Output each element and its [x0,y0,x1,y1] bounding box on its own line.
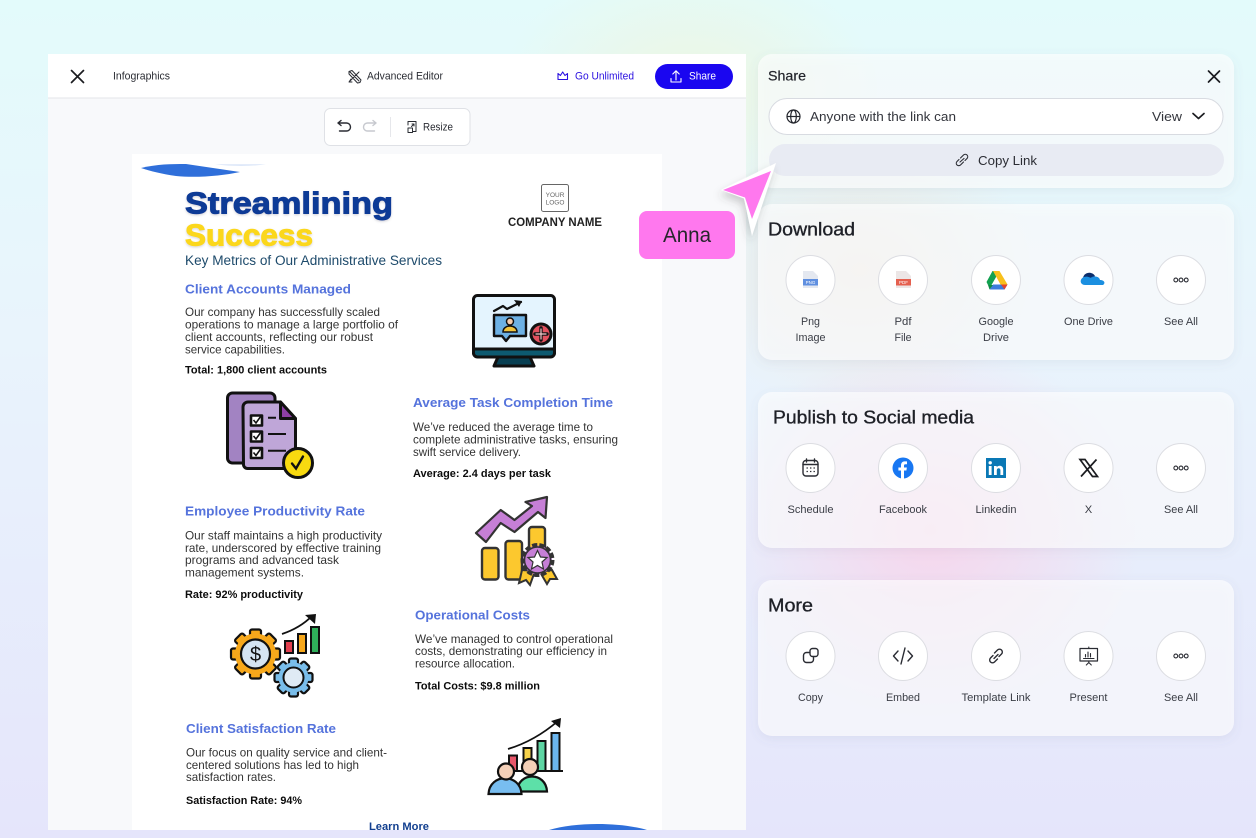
company logo: YOUR [546,192,565,199]
option: pdf file [878,256,928,344]
icon: resize [408,122,416,132]
resize label: Resize [423,122,453,134]
option: see all [1156,444,1206,516]
section: employee productivity: Rate: 92% productivity [185,589,304,601]
bottom wave [549,824,647,830]
option: see all [1156,632,1206,704]
company logo [508,184,602,229]
option: see all [1156,256,1206,328]
option: png image: PNG [806,280,816,285]
option: one drive: One Drive [1064,316,1113,328]
link access dropdown [769,98,1223,134]
icon: close panel [1208,71,1220,82]
option: google drive: Google [978,316,1014,328]
panel: publish to social media [758,392,1234,548]
editor top bar [48,54,746,98]
section: operational costs: resource allocation. [415,658,515,670]
icon: pink cursor arrow [721,163,776,236]
go unlimited link: Go Unlimited [575,70,634,82]
section: client satisfaction: Our focus on quality service and client- [186,746,387,760]
panel: download [758,204,1234,360]
section: client satisfaction: centered solutions has led to high [186,759,359,772]
section: employee productivity [185,504,382,601]
option: see all: See All [1164,316,1198,328]
subtitle: Key Metrics of Our Administrative Services [185,253,442,268]
option: facebook: Facebook [879,504,927,516]
panel: more [758,580,1234,736]
top wave [141,164,266,177]
company logo: COMPANY NAME [508,217,602,229]
section: employee productivity: management systems. [185,566,304,580]
share heading: Share [768,68,806,84]
option: template link: Template Link [962,692,1031,704]
option: linkedin [972,444,1020,516]
advanced editor button: Advanced Editor [367,70,443,82]
option: see all: See All [1164,504,1198,516]
title [185,191,392,248]
icon: checklist documents [228,393,312,478]
section: client accounts [185,282,399,376]
section: employee productivity: Employee Productivity Rate [185,504,365,518]
section: operational costs: Total Costs: $9.8 million [415,680,540,692]
learn more link: Learn More [369,821,429,833]
section: average task completion: Average Task Completion Time [413,395,613,410]
section: operational costs: We’ve managed to control operational [415,633,613,646]
icon: people with growth chart [488,718,563,794]
company logo: LOGO [546,200,564,206]
icon: redo [364,120,376,131]
link access dropdown: Anyone with the link can [810,109,956,124]
copy link button [769,144,1224,176]
share button [655,64,733,89]
copy link button: Copy Link [978,153,1038,168]
option: see all: See All [1164,692,1198,704]
option: schedule: Schedule [788,504,834,516]
section: client accounts: Our company has successfully scaled [185,306,380,319]
section: average task completion: complete administrative tasks, ensuring [413,434,618,446]
section: client accounts: service capabilities. [185,344,285,356]
more heading: More [768,596,813,616]
icon: bar chart with medal [476,497,557,585]
section: average task completion: Average: 2.4 days per task [413,468,552,480]
panel: infographic document [132,154,662,833]
share button: Share [689,70,716,82]
name tag: anna [639,211,735,259]
option: copy [786,632,835,704]
icon: close editor [72,70,84,82]
option: x: X [1085,504,1093,516]
option: embed: Embed [886,692,920,704]
section: client accounts: Total: 1,800 client accounts [185,364,327,376]
option: schedule [786,444,835,516]
option: x [1064,444,1113,516]
option: pdf file: PDF [899,280,908,285]
option: pdf file: File [894,332,912,344]
section: client satisfaction [186,721,387,807]
name tag: anna: Anna [663,224,711,247]
link access dropdown: View [1152,109,1183,124]
option: copy: Copy [798,692,823,704]
section: client satisfaction: satisfaction rates. [186,771,276,784]
option: present [1064,632,1113,704]
title: Success [185,218,313,252]
section: employee productivity: Our staff maintains a high productivity [185,530,382,542]
section: employee productivity: rate, underscored by effective training [185,542,381,555]
section: operational costs: costs, demonstrating our efficiency in [415,645,607,658]
icon: computer with user [474,296,554,366]
section: client accounts: Client Accounts Managed [185,282,351,296]
option: present: Present [1070,692,1108,704]
section: average task completion: swift service delivery. [413,446,521,459]
option: pdf file: Pdf [894,316,912,328]
section: employee productivity: programs and advanced task [185,554,339,567]
option: png image: Png [801,316,820,328]
icon: globe [787,110,800,123]
panel: editor window [48,54,746,833]
section: client satisfaction: Satisfaction Rate: 94% [186,795,302,807]
toolbar [324,108,470,146]
option: png image [786,256,835,344]
section: operational costs: Operational Costs [415,608,530,622]
section: operational costs [415,608,613,692]
option: linkedin: Linkedin [976,504,1016,516]
option: google drive: Drive [983,332,1009,344]
section: client accounts: client accounts, reflecting our robust [185,331,374,344]
option: one drive [1064,256,1113,328]
download heading: Download [768,220,855,240]
icon: gears and chart: $ [250,644,261,666]
panel: share [758,54,1234,188]
option: png image: Image [796,332,826,344]
option: template link [962,632,1031,704]
social heading: Publish to Social media [773,408,975,428]
infographics label: Infographics [113,70,170,82]
icon: gears and chart [231,614,319,696]
section: client satisfaction: Client Satisfaction Rate [186,721,336,736]
option: embed [878,632,928,704]
section: average task completion [413,395,618,480]
section: client accounts: operations to manage a large portfolio of [185,318,399,332]
icon: undo [338,120,350,131]
title: Streamlining [185,186,393,220]
option: google drive [972,256,1020,344]
section: average task completion: We’ve reduced the average time to [413,421,593,434]
option: facebook [878,444,928,516]
